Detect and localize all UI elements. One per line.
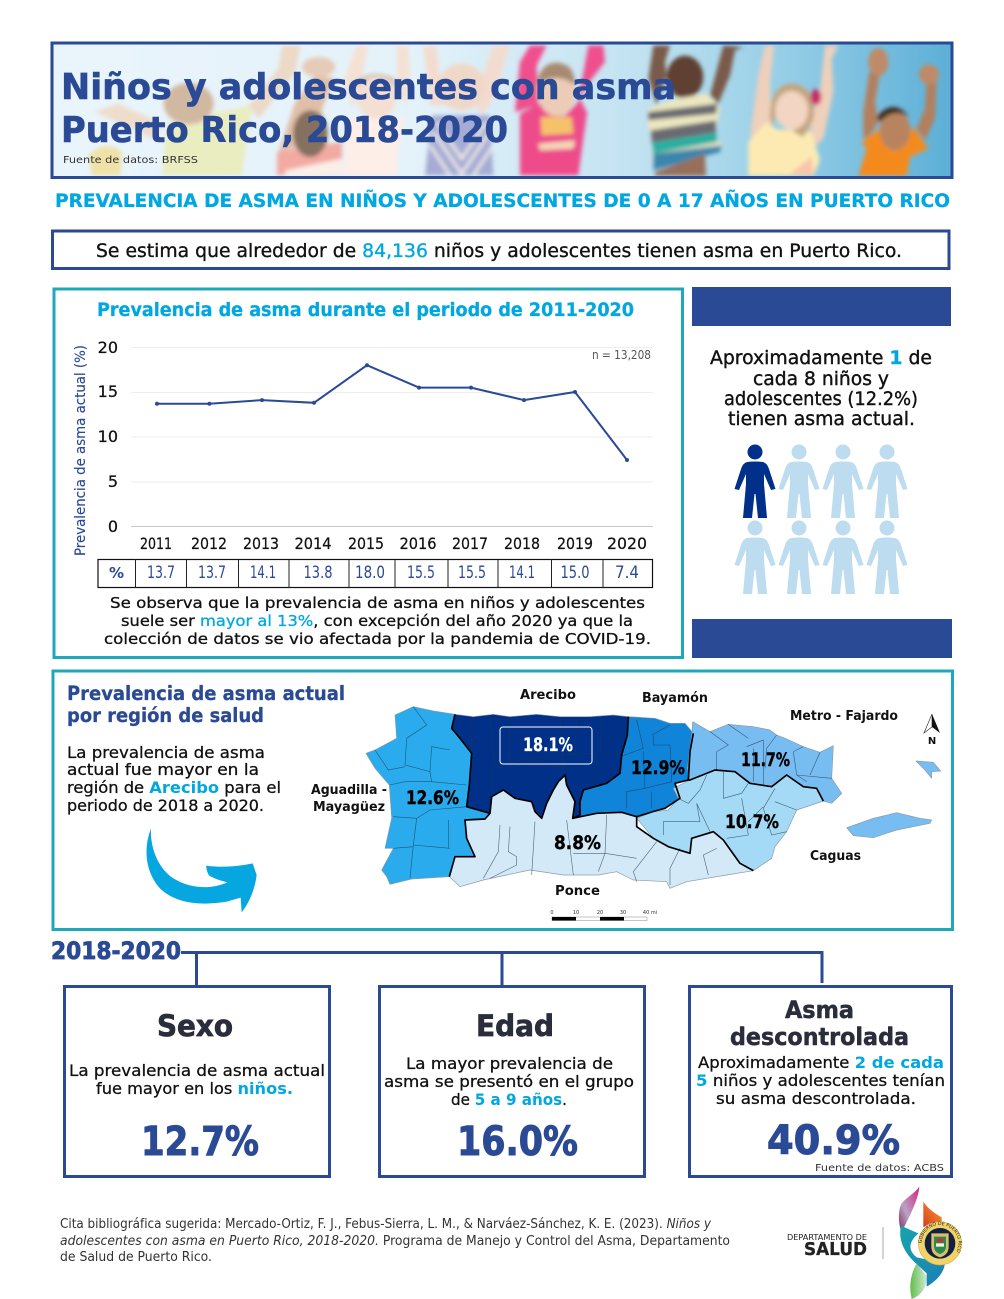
estimate callout: Se estima que alrededor de 84,136 niños y adolescentes tienen asma en Puerto Rico. [96,240,902,262]
heading [730,996,909,1051]
region percentages: 12.9% [631,758,685,779]
region heading: por región de salud [67,704,264,727]
region names: Ponce [555,884,600,899]
line chart: 2015 [348,534,384,553]
description: La mayor prevalencia de [406,1054,613,1073]
region percentages: 10.7% [725,812,779,833]
line chart: 15 [98,382,118,401]
data table: 7.4 [615,563,639,583]
data table: % [109,564,124,582]
bottom blue bar [692,619,952,658]
region: Bayamón [573,717,693,818]
region names: Mayagüez [313,800,385,815]
region heading: Prevalencia de asma actual [67,682,345,705]
line chart: 20 [98,338,118,357]
citation: adolescentes con asma en Puerto Rico, 2018-2020. Programa de Manejo y Control del Asma, Departamento [60,1234,730,1249]
logo: Departamento de Salud [787,1186,962,1299]
data table: 18.0 [355,563,385,583]
data table: 14.1 [250,563,276,583]
heading: Edad [476,1009,554,1043]
line chart: 2017 [452,534,488,553]
people pictogram [734,444,908,594]
icon: ribbon emblem with seal: GOBIERNO DE PUERTO RICO [918,1222,962,1252]
panel: trend chart 2011-2020 [54,289,682,658]
description [69,1061,325,1098]
region names: Arecibo [520,688,576,703]
line chart: 2014 [294,534,332,553]
panel: sexo [64,986,330,1176]
chart note: suele ser mayor al 13% , con excepción del año 2020 ya que la [121,612,633,630]
data source: Fuente de datos: ACBS [815,1163,944,1174]
region text: La prevalencia de asma [67,743,265,762]
section heading: PREVALENCIA DE ASMA EN NIÑOS Y ADOLESCENTES DE 0 A 17 AÑOS EN PUERTO RICO [55,188,950,212]
island: Vieques [847,813,932,838]
chart note [104,594,651,648]
region text: actual fue mayor en la [67,760,259,779]
citation [60,1217,730,1265]
banner title [61,67,676,151]
region names: Bayamón [642,691,708,706]
header banner [52,43,952,178]
line chart: 2018 [504,534,540,553]
island: Culebra [916,761,941,778]
line chart: 2011 [140,534,172,553]
region: Aguadilla-Mayagüez [366,707,490,884]
value: 40.9% [767,1118,900,1164]
data table: 14.1 [509,563,535,583]
data table: 15.5 [407,563,435,583]
connector lines [181,952,822,986]
citation: Cita bibliográfica sugerida: Mercado-Ortiz, F. J., Febus-Sierra, L. M., & Narváez-Sánchez, K. E. (2023). Niños y [60,1217,711,1232]
data table: 13.7 [147,563,175,583]
description: 5 niños y adolescentes tenían [696,1071,945,1090]
citation: de Salud de Puerto Rico. [60,1250,212,1265]
region heading [67,682,345,727]
data table: 13.8 [304,563,332,583]
description: asma se presentó en el grupo [384,1072,634,1091]
icon: north arrow: N [928,736,936,747]
region: Ponce [449,775,753,888]
top blue bar [692,287,951,326]
right children [647,45,939,176]
logo: Departamento de Salud: DEPARTAMENTO DE [787,1233,867,1242]
middle children [343,45,605,175]
line chart: Prevalencia de asma actual (%) [73,345,89,556]
description [384,1054,634,1109]
line chart: n = 13,208 [592,348,651,362]
line chart: 0 [108,517,118,536]
region: Caguas [637,770,823,871]
line chart: 2013 [243,534,279,553]
region percentages: 8.8% [554,833,601,854]
region names: Caguas [810,849,861,864]
data table [98,560,652,588]
heading: Asma [785,996,854,1024]
region text: periodo de 2018 a 2020. [67,796,264,815]
statement text: Aproximadamente 1 de [710,347,932,369]
data table: 15.5 [458,563,486,583]
region names [311,688,898,899]
region percentages [406,750,790,854]
icon: ribbon emblem with seal [898,1186,962,1299]
description: su asma descontrolada. [716,1089,916,1108]
description: Aproximadamente 2 de cada [698,1053,944,1072]
icon: curved arrow [147,828,257,912]
value: 12.7% [141,1119,259,1165]
chart heading: Prevalencia de asma durante el periodo de 2011-2020 [97,299,634,321]
description: La prevalencia de asma actual [69,1061,325,1080]
scale bar: 40 mi [643,910,657,916]
description: de 5 a 9 años. [451,1090,567,1109]
icon: north arrow [924,714,940,747]
callout: Arecibo value box: 18.1% [523,734,573,756]
logo: Departamento de Salud: SALUD [804,1239,867,1260]
statement text: adolescentes (12.2%) [724,388,918,410]
region: Arecibo [452,714,628,818]
statement text: cada 8 niños y [753,368,889,390]
chart note: Se observa que la prevalencia de asma en niños y adolescentes [110,594,645,612]
panel: asma descontrolada [690,986,952,1176]
region percentages: 11.7% [741,750,790,771]
line chart: 2012 [191,534,227,553]
line chart: 2019 [557,534,593,553]
line chart [73,338,653,556]
scale bar: 10 [573,910,579,916]
heading: Sexo [157,1009,233,1043]
value: 16.0% [457,1119,578,1165]
banner title: Niños y adolescentes con asma [61,67,676,108]
map of Puerto Rico health regions [366,707,941,888]
line chart: 10 [98,427,118,446]
banner photo of jumping children [52,43,952,177]
chart note: colección de datos se vio afectada por la pandemia de COVID-19. [104,630,651,648]
panel: prevalence by health region [53,671,952,930]
callout: Arecibo value box [500,727,592,764]
line chart: 2016 [400,534,436,553]
description [696,1053,945,1108]
line chart: 2020 [607,534,647,553]
estimate callout [52,231,949,268]
panel: edad [380,986,644,1176]
data table: 13.7 [198,563,226,583]
region names: Metro - Fajardo [790,709,898,724]
scale bar: 0 [550,910,554,916]
description: fue mayor en los niños. [96,1079,293,1098]
region text [67,743,281,815]
panel: 1 in 8 children [692,287,952,658]
region: Metro-Fajardo [687,722,842,803]
scale bar: 30 [620,910,626,916]
banner title: Puerto Rico, 2018-2020 [61,110,508,151]
period label: 2018-2020 [51,937,181,965]
heading: descontrolada [730,1023,909,1051]
region names: Aguadilla - [311,783,387,798]
region percentages: 12.6% [406,788,459,809]
scale bar: 20 [597,910,603,916]
scale bar [550,910,657,920]
region text: región de Arecibo para el [67,778,281,797]
faded children on the left [89,45,342,175]
banner data source: Fuente de datos: BRFSS [63,155,198,166]
statement text [710,347,932,430]
statement text: tienen asma actual. [728,408,915,430]
line chart: 5 [108,472,118,491]
data table: 15.0 [560,563,590,583]
